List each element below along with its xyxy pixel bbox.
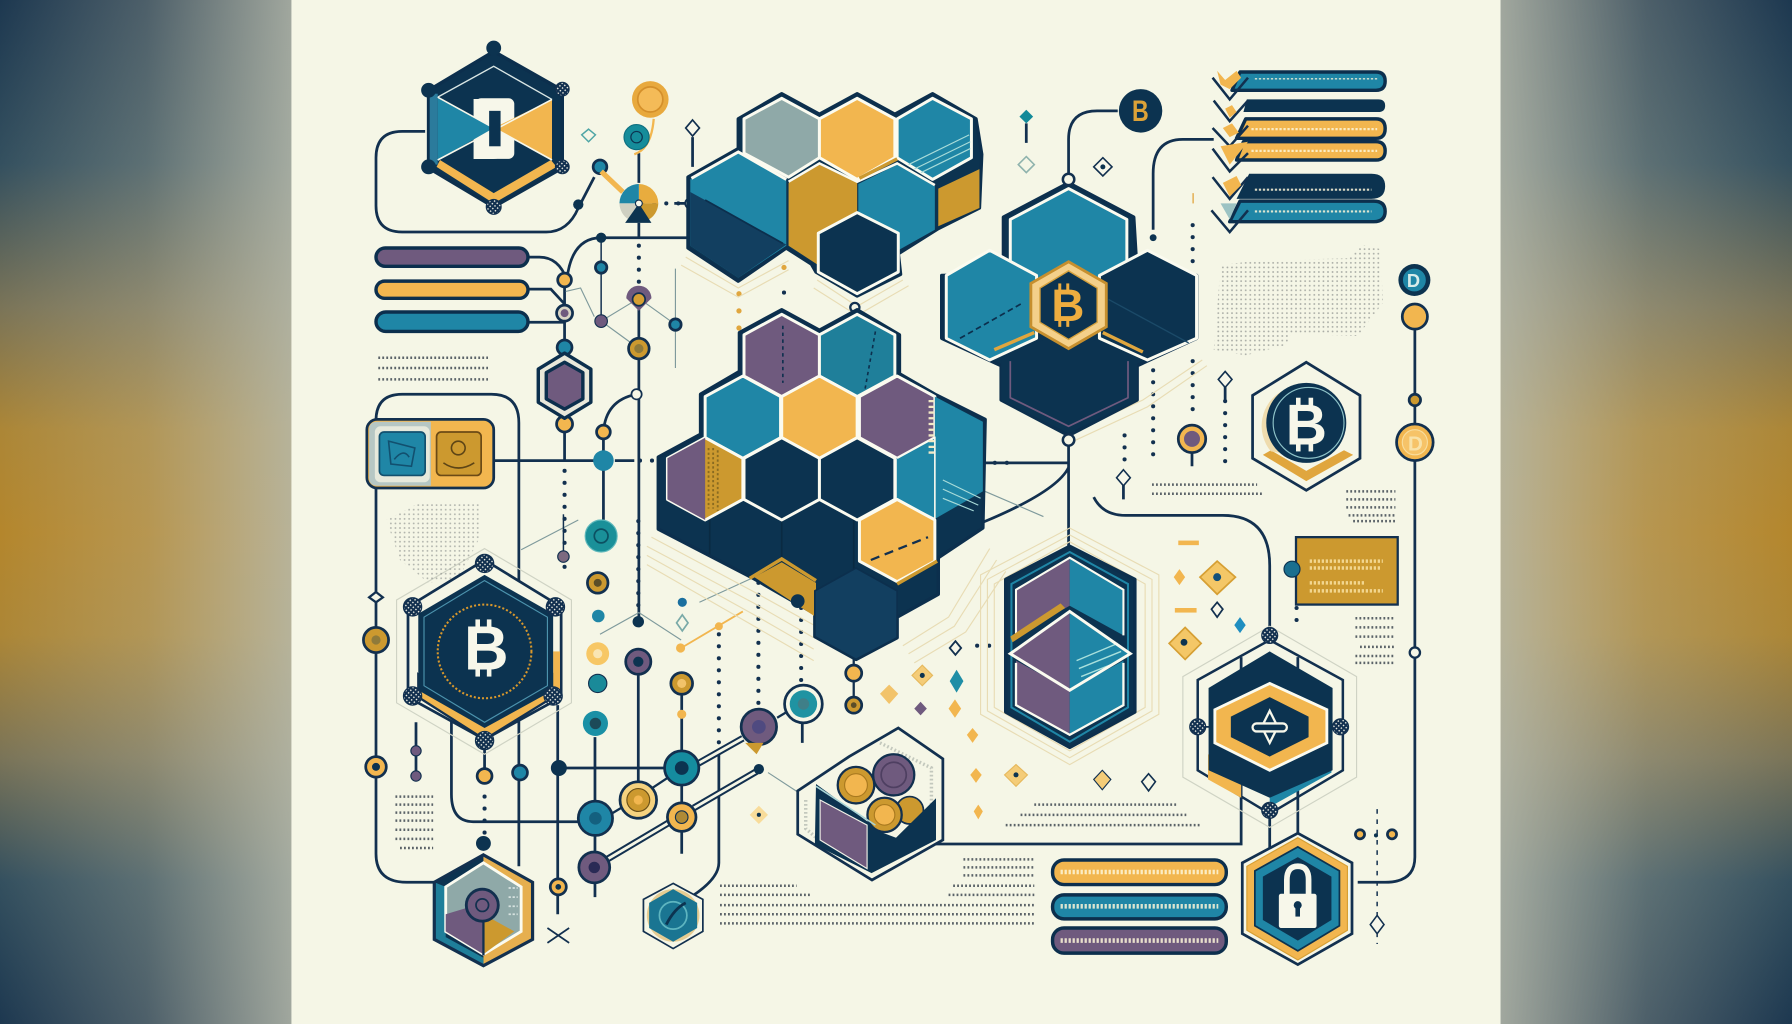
letter B: B <box>470 80 511 178</box>
icon: gold bitcoin hexagon <box>1031 262 1106 349</box>
nodes: left chain and small network <box>557 233 681 471</box>
contour hatch shadows <box>397 257 1357 827</box>
micro text blocks: bottom <box>395 797 1200 923</box>
icon: exchange glyph <box>1253 711 1287 743</box>
background: left gradient band <box>0 0 293 1024</box>
icons: right rail coins <box>1397 264 1433 658</box>
micro text blocks: right <box>1152 485 1395 663</box>
dotted connector lines <box>485 203 1297 840</box>
icon: small purple hexagon <box>538 353 591 418</box>
middle diamond <box>1010 611 1130 690</box>
thick double connectors <box>607 711 789 859</box>
icon: gold bitcoin hexagon: B <box>1051 280 1084 331</box>
connector node between clusters <box>850 303 859 312</box>
nodes: central column circles <box>583 520 723 736</box>
icon: bitcoin badge hexagon: B <box>1286 394 1327 458</box>
nodes: lower left rail <box>363 551 569 943</box>
icon: bottom-left hexagon with gear <box>434 836 533 966</box>
nodes: right of cluster <box>1117 371 1232 486</box>
icon: pie node <box>619 184 695 223</box>
icon: B coin top <box>1119 89 1162 133</box>
card: dual icon tile <box>367 419 494 488</box>
icons: right rail coins: D <box>1408 432 1423 455</box>
panel: large bitcoin hexagon: B <box>464 615 509 684</box>
icons: chevrons <box>1211 71 1248 232</box>
icon: lock <box>1279 866 1317 928</box>
dot cloud: upper right <box>1214 245 1383 355</box>
icon: exchange hexagon <box>1190 627 1349 818</box>
icon: small teal hexagon seal <box>643 883 703 949</box>
icon: lower right dashed node cluster <box>1355 830 1397 934</box>
background: cream main panel <box>291 0 1501 1024</box>
panel: top-left hexagon with B <box>421 41 569 214</box>
nodes: large ringed circles <box>578 659 862 883</box>
panel: top hexagon cluster <box>688 94 982 296</box>
icon: B coin top: B <box>1132 94 1149 128</box>
checklist bars: top right <box>1150 71 1385 241</box>
background: right gradient band <box>1501 0 1792 1024</box>
lower panel <box>1016 661 1123 735</box>
note card: gold <box>1284 537 1398 605</box>
icon: teal tile <box>379 432 425 475</box>
pill bars: bottom <box>1053 860 1226 953</box>
icon: bitcoin badge hexagon <box>1253 362 1360 490</box>
panel: large bitcoin hexagon <box>403 554 565 750</box>
connector network lines <box>376 111 1415 944</box>
icon: padlock hexagon <box>1242 833 1352 965</box>
panel: purple and teal stacked hexagon <box>1006 546 1135 747</box>
decorative diamonds group <box>750 541 1246 824</box>
dot cloud: left <box>386 504 480 583</box>
upper panel <box>1016 558 1123 635</box>
icon: wallet with coins <box>798 728 943 880</box>
panel: right hexagon cluster with bitcoin <box>942 174 1197 446</box>
icons: coins and nodes at top centre-left <box>573 81 1112 210</box>
icons: right rail coins: D <box>1407 270 1420 291</box>
panel: central hexagon stack <box>658 310 985 659</box>
icon: gold tile <box>437 432 481 475</box>
micro text block: left <box>378 358 488 379</box>
legend bars: left <box>376 248 528 331</box>
